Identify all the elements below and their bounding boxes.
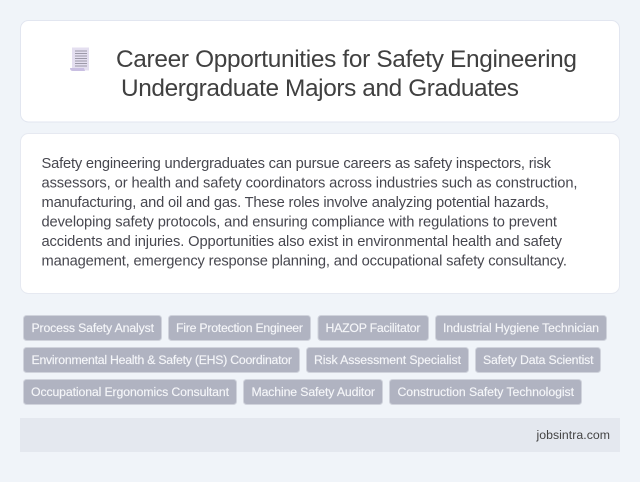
title: Undergraduate Majors and Graduates: [121, 75, 519, 102]
tag: Occupational Ergonomics Consultant: [24, 380, 236, 404]
tag: Construction Safety Technologist: [390, 380, 582, 404]
panel: title card: [20, 20, 620, 122]
text block: description: Safety engineering undergraduates can pursue careers as safety inspectors, risk: [42, 156, 552, 172]
footer: [20, 418, 620, 452]
tag: Process Safety Analyst: [24, 316, 162, 340]
tag: Fire Protection Engineer: [168, 316, 310, 340]
tag: Process Safety Analyst: Process Safety Analyst: [32, 321, 155, 335]
tag: HAZOP Facilitator: [318, 316, 428, 340]
footer source text: jobsintra.com: [536, 428, 610, 442]
tag: Risk Assessment Specialist: Risk Assessment Specialist: [314, 353, 462, 367]
text block: description: [42, 156, 578, 270]
tag: Machine Safety Auditor: Machine Safety Auditor: [252, 385, 375, 399]
tag: HAZOP Facilitator: HAZOP Facilitator: [326, 321, 420, 335]
tag: Industrial Hygiene Technician: Industrial Hygiene Technician: [443, 321, 599, 335]
title: [116, 46, 577, 102]
tag: Safety Data Scientist: [476, 348, 600, 372]
text block: description: manufacturing, and oil and gas. These roles involve analyzing potential hazards,: [42, 195, 549, 211]
title: Career Opportunities for Safety Engineering: [116, 46, 577, 73]
tag: Safety Data Scientist: Safety Data Scientist: [483, 353, 594, 367]
text block: description: accidents and injuries. Opportunities also exist in environmental health and safety: [42, 234, 563, 250]
text block: description: management, emergency response planning, and occupational safety consultancy.: [42, 254, 567, 270]
text block: description: assessors, or health and safety coordinators across industries such as construction,: [42, 176, 578, 192]
text block: description: developing safety protocols, and ensuring compliance with regulations to prevent: [42, 214, 557, 230]
tag: Fire Protection Engineer: Fire Protection Engineer: [176, 321, 303, 335]
tag: Risk Assessment Specialist: [306, 348, 468, 372]
tag: Machine Safety Auditor: [244, 380, 382, 404]
icon: document scroll: [70, 48, 89, 71]
tag: Environmental Health & Safety (EHS) Coordinator: Environmental Health & Safety (EHS) Coordinator: [32, 353, 292, 367]
tag: Environmental Health & Safety (EHS) Coordinator: [24, 348, 300, 372]
panel: description: [20, 134, 620, 294]
tag: Industrial Hygiene Technician: [436, 316, 606, 340]
tag: Construction Safety Technologist: Construction Safety Technologist: [398, 385, 575, 399]
tag: Occupational Ergonomics Consultant: Occupational Ergonomics Consultant: [31, 385, 230, 399]
tag list: [24, 316, 606, 404]
